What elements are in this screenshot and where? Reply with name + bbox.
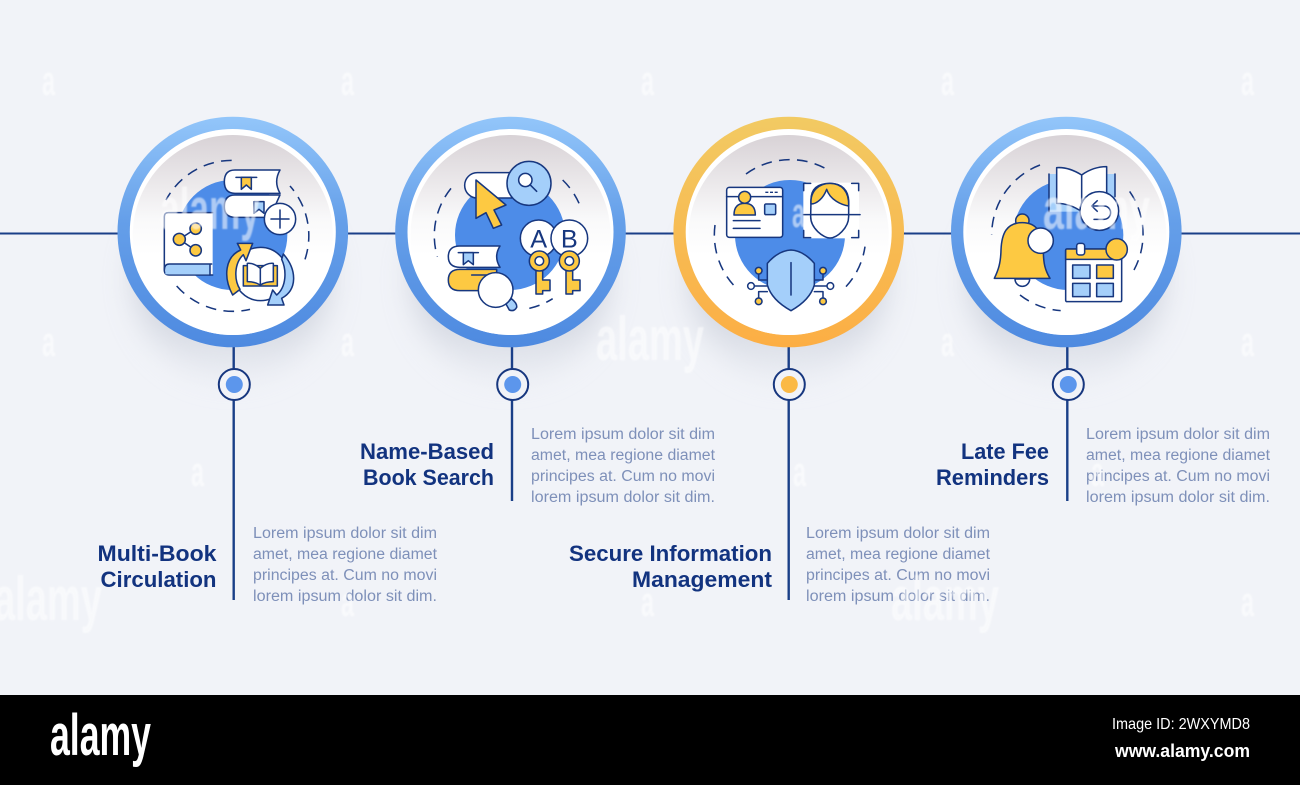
panel: name-based book search xyxy=(360,117,716,506)
watermarks: a xyxy=(1091,448,1104,495)
heading: Book Search xyxy=(363,465,494,490)
stem line xyxy=(1066,340,1069,501)
watermarks: a xyxy=(191,448,204,495)
heading: Secure Information xyxy=(569,541,772,566)
body text: Lorem ipsum dolor sit dim xyxy=(531,426,715,443)
body text: principes at. Cum no movi xyxy=(253,567,437,584)
body text: principes at. Cum no movi xyxy=(1086,468,1270,485)
heading: Multi-Book xyxy=(98,541,217,566)
heading: Late Fee xyxy=(961,439,1049,464)
heading xyxy=(936,439,1049,490)
ring xyxy=(395,117,626,347)
footer band xyxy=(0,695,1300,785)
watermarks: a xyxy=(1241,578,1254,625)
body text: amet, mea regione diamet xyxy=(1086,447,1271,464)
panel: multi-book circulation xyxy=(98,117,438,605)
stem line xyxy=(232,340,235,600)
icon: name search: B xyxy=(561,225,578,253)
image id: Image ID: 2WXYMD8 xyxy=(1112,716,1250,733)
body text: lorem ipsum dolor sit dim. xyxy=(806,588,990,605)
stem line xyxy=(788,340,790,600)
watermarks: a xyxy=(42,318,55,365)
body text: Lorem ipsum dolor sit dim xyxy=(806,525,990,542)
body text: amet, mea regione diamet xyxy=(253,546,438,563)
icon: late fee reminder xyxy=(992,165,1143,311)
panel: secure information management xyxy=(569,117,991,605)
circle shadow xyxy=(968,182,1164,378)
panel: late fee reminders xyxy=(936,117,1271,506)
watermarks: a xyxy=(941,57,954,104)
watermarks: alamy xyxy=(891,565,999,634)
timeline node xyxy=(219,369,250,400)
body text: lorem ipsum dolor sit dim. xyxy=(1086,489,1270,506)
footer logo: alamy xyxy=(50,703,151,768)
watermarks: a xyxy=(341,57,354,104)
icon: book circulation xyxy=(164,160,309,311)
watermarks: a xyxy=(941,318,954,365)
timeline node xyxy=(497,369,528,400)
ring xyxy=(673,117,904,347)
icon: name search xyxy=(434,161,588,311)
timeline node xyxy=(1053,369,1084,400)
heading xyxy=(360,439,494,490)
watermarks: a xyxy=(641,578,654,625)
watermarks: a xyxy=(341,578,354,625)
circle shadow xyxy=(412,182,608,378)
ring xyxy=(951,117,1182,347)
watermarks: a xyxy=(792,189,805,236)
icon: name search: A xyxy=(530,225,547,253)
watermarks: a xyxy=(341,318,354,365)
circle shadow xyxy=(134,182,330,378)
heading: Reminders xyxy=(936,465,1049,490)
circle shadow xyxy=(690,182,886,378)
body text: amet, mea regione diamet xyxy=(531,447,716,464)
watermarks: alamy xyxy=(596,305,704,374)
website: www.alamy.com xyxy=(1114,741,1250,761)
watermarks: a xyxy=(641,57,654,104)
ring xyxy=(118,117,348,347)
heading xyxy=(98,541,217,592)
body text xyxy=(806,525,991,605)
stem line xyxy=(511,340,513,501)
body text: principes at. Cum no movi xyxy=(806,567,990,584)
inner disc xyxy=(130,129,336,335)
inner disc xyxy=(686,129,892,335)
heading: Circulation xyxy=(100,567,216,592)
inner disc xyxy=(963,129,1169,335)
body text xyxy=(253,525,438,605)
watermarks xyxy=(0,57,1254,634)
body text: lorem ipsum dolor sit dim. xyxy=(253,588,437,605)
icon: secure data xyxy=(714,160,865,311)
watermarks: alamy xyxy=(160,177,260,242)
body text: Lorem ipsum dolor sit dim xyxy=(1086,426,1270,443)
body text: amet, mea regione diamet xyxy=(806,546,991,563)
watermarks: a xyxy=(1241,318,1254,365)
body text: Lorem ipsum dolor sit dim xyxy=(253,525,437,542)
body text xyxy=(1086,426,1271,506)
heading xyxy=(569,541,773,592)
timeline node xyxy=(774,369,805,400)
watermarks: a xyxy=(42,57,55,104)
inner disc xyxy=(408,129,614,335)
horizontal timeline line xyxy=(0,232,1300,234)
watermarks: a xyxy=(1241,57,1254,104)
heading: Name-Based xyxy=(360,439,494,464)
watermarks: a xyxy=(793,448,806,495)
body text xyxy=(531,426,716,506)
body text: principes at. Cum no movi xyxy=(531,468,715,485)
heading: Management xyxy=(632,567,773,592)
watermarks: alamy xyxy=(1043,177,1150,242)
body text: lorem ipsum dolor sit dim. xyxy=(531,489,715,506)
